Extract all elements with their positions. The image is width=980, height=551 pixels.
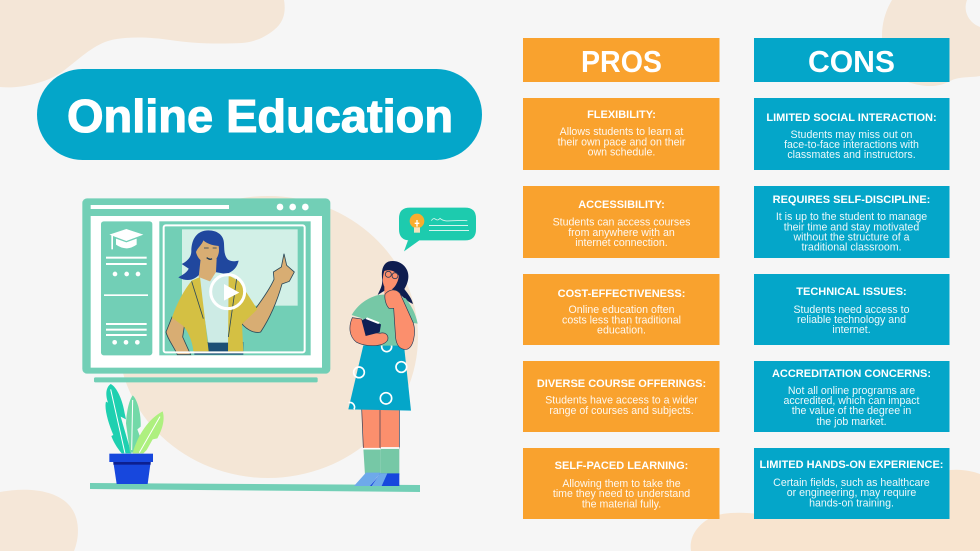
con: limited social interaction: LIMITED SOCIAL INTERACTION:	[766, 112, 937, 124]
pro: cost-effectiveness: education.	[597, 324, 646, 336]
con: limited hands-on experience: hands-on training.	[809, 498, 894, 510]
title pill	[37, 69, 482, 160]
lower arm	[350, 318, 388, 346]
con: requires self-discipline: without the structure of a	[792, 232, 910, 244]
con: limited hands-on experience	[754, 448, 950, 519]
cons column	[754, 38, 950, 519]
con: requires self-discipline: traditional classroom.	[801, 242, 902, 254]
pro: flexibility: their own pace and on their	[558, 136, 686, 148]
book	[362, 318, 381, 336]
pro: self-paced learning: Allowing them to take the	[562, 478, 681, 490]
pro: diverse course offerings: DIVERSE COURSE OFFERINGS:	[537, 378, 706, 390]
con: requires self-discipline: It is up to the student to manage	[776, 211, 927, 223]
background blob: bottom right	[691, 470, 980, 551]
con: technical issues: TECHNICAL ISSUES:	[796, 286, 907, 298]
beige circle behind illustration	[118, 196, 418, 478]
background blob: top right	[882, 0, 980, 86]
illustration: potted plant	[106, 384, 164, 484]
student upper body	[350, 261, 418, 349]
con: technical issues: Students need access to	[793, 304, 910, 316]
con: accreditation concerns: the value of the degree in	[792, 405, 911, 417]
pros header	[523, 38, 720, 82]
pro: self-paced learning: SELF-PACED LEARNING:	[555, 460, 688, 472]
con: requires self-discipline: their time and stay motivated	[784, 222, 919, 234]
torso	[352, 294, 418, 346]
pro: flexibility: Allows students to learn at	[560, 126, 683, 138]
teacher figure	[166, 230, 294, 355]
con: limited hands-on experience: LIMITED HANDS-ON EXPERIENCE:	[760, 459, 943, 471]
con: limited hands-on experience: or engineering, may require	[787, 487, 916, 499]
pro: accessibility	[523, 186, 720, 258]
con: limited social interaction: classmates and instructors.	[787, 149, 916, 161]
pro: cost-effectiveness	[523, 274, 720, 345]
play button	[211, 275, 245, 309]
floor shelf	[90, 483, 420, 492]
speech bubble with light bulb	[399, 208, 476, 251]
con: accreditation concerns: the job market.	[816, 416, 887, 428]
pros header: PROS	[581, 44, 662, 79]
con: limited social interaction: Students may miss out on	[791, 129, 913, 141]
skirt	[348, 345, 411, 411]
pro: accessibility: internet connection.	[575, 237, 668, 249]
pro: accessibility: ACCESSIBILITY:	[578, 199, 665, 211]
pro: diverse course offerings: range of courses and subjects.	[549, 405, 694, 417]
t-shirt	[199, 277, 229, 343]
hair	[378, 261, 413, 304]
trousers	[194, 342, 243, 355]
glasses	[385, 271, 398, 279]
background blob: top left	[0, 0, 285, 87]
pros column	[523, 38, 720, 519]
title text: Online Education	[67, 90, 453, 142]
con: requires self-discipline	[754, 186, 950, 258]
pro: self-paced learning: time they need to understand	[553, 488, 690, 500]
face and neck	[383, 270, 399, 297]
legs and shoes	[362, 408, 399, 448]
hair	[178, 230, 239, 280]
con: technical issues: reliable technology and	[797, 314, 906, 326]
pro: flexibility: own schedule.	[588, 146, 655, 158]
con: accreditation concerns	[754, 361, 950, 432]
con: accreditation concerns: ACCREDITATION CONCERNS:	[772, 368, 931, 380]
pro: diverse course offerings: Students have access to a wider	[545, 394, 698, 406]
raised right arm	[242, 254, 294, 332]
con: accreditation concerns: accredited, which can impact	[783, 395, 920, 407]
pro: self-paced learning: the material fully.	[582, 498, 661, 510]
pro: cost-effectiveness: COST-EFFECTIVENESS:	[558, 288, 685, 300]
cons header: CONS	[808, 44, 895, 79]
con: technical issues	[754, 274, 950, 345]
neck and face	[199, 259, 217, 281]
pro: diverse course offerings	[523, 361, 720, 432]
illustration: video lesson window	[82, 198, 330, 382]
sidebar with graduation cap	[101, 221, 152, 355]
cons header	[754, 38, 950, 82]
jacket	[172, 277, 209, 351]
con: limited social interaction	[754, 98, 950, 170]
illustration: thinking student with book	[348, 208, 476, 486]
pro: flexibility	[523, 98, 720, 170]
con: limited hands-on experience: Certain fields, such as healthcare	[773, 477, 930, 489]
raised arm and hand	[385, 290, 414, 349]
pro: cost-effectiveness: Online education often	[568, 304, 675, 316]
pro: accessibility: Students can access courses	[553, 216, 690, 228]
con: limited social interaction: face-to-face interactions with	[784, 139, 919, 151]
pro: flexibility: FLEXIBILITY:	[587, 109, 656, 121]
left arm	[166, 317, 191, 355]
background blob: bottom left	[0, 490, 78, 551]
pro: cost-effectiveness: costs less than traditional	[562, 314, 681, 326]
pro: self-paced learning	[523, 448, 720, 519]
con: requires self-discipline: REQUIRES SELF-DISCIPLINE:	[773, 194, 930, 206]
con: accreditation concerns: Not all online programs are	[788, 385, 915, 397]
pro: accessibility: from anywhere with an	[568, 227, 675, 239]
video panel background	[159, 221, 311, 355]
con: technical issues: internet.	[832, 324, 871, 336]
